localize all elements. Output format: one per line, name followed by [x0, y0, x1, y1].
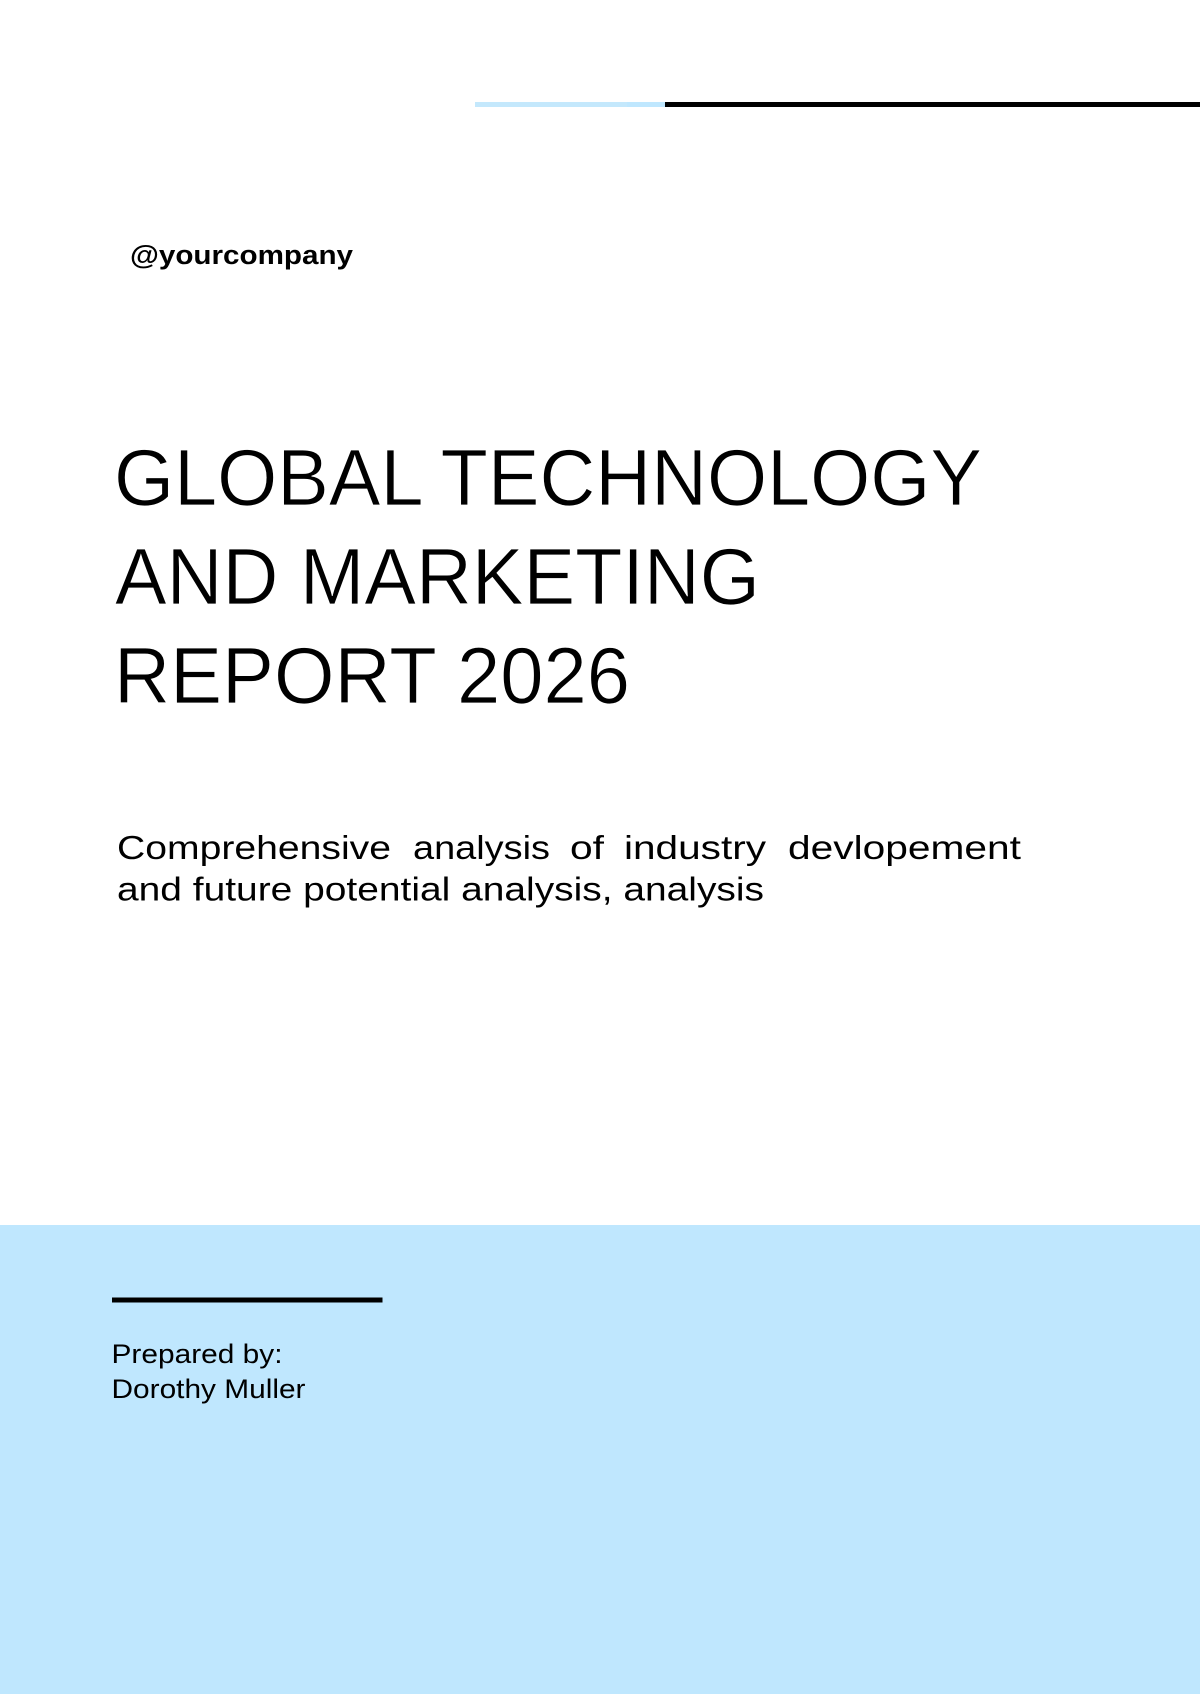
title: REPORT 2026: [114, 631, 630, 720]
title: GLOBAL TECHNOLOGY: [114, 433, 982, 522]
subtitle: Comprehensive: [117, 829, 391, 866]
subtitle: [117, 829, 1021, 908]
subtitle: and future potential analysis, analysis: [117, 870, 764, 908]
top accent line: [475, 102, 1200, 107]
title: [114, 433, 982, 720]
subtitle: devlopement: [788, 829, 1021, 866]
prepared by text: Dorothy Muller: [112, 1374, 306, 1404]
subtitle: analysis: [413, 829, 550, 866]
subtitle: of: [570, 829, 605, 866]
subtitle: industry: [624, 829, 767, 866]
footer rule: [112, 1298, 382, 1302]
title: AND MARKETING: [115, 532, 760, 621]
prepared by text: [112, 1339, 306, 1404]
company handle: @yourcompany: [130, 240, 353, 270]
prepared by text: Prepared by:: [112, 1339, 282, 1369]
panel: footer: [0, 1225, 1200, 1694]
